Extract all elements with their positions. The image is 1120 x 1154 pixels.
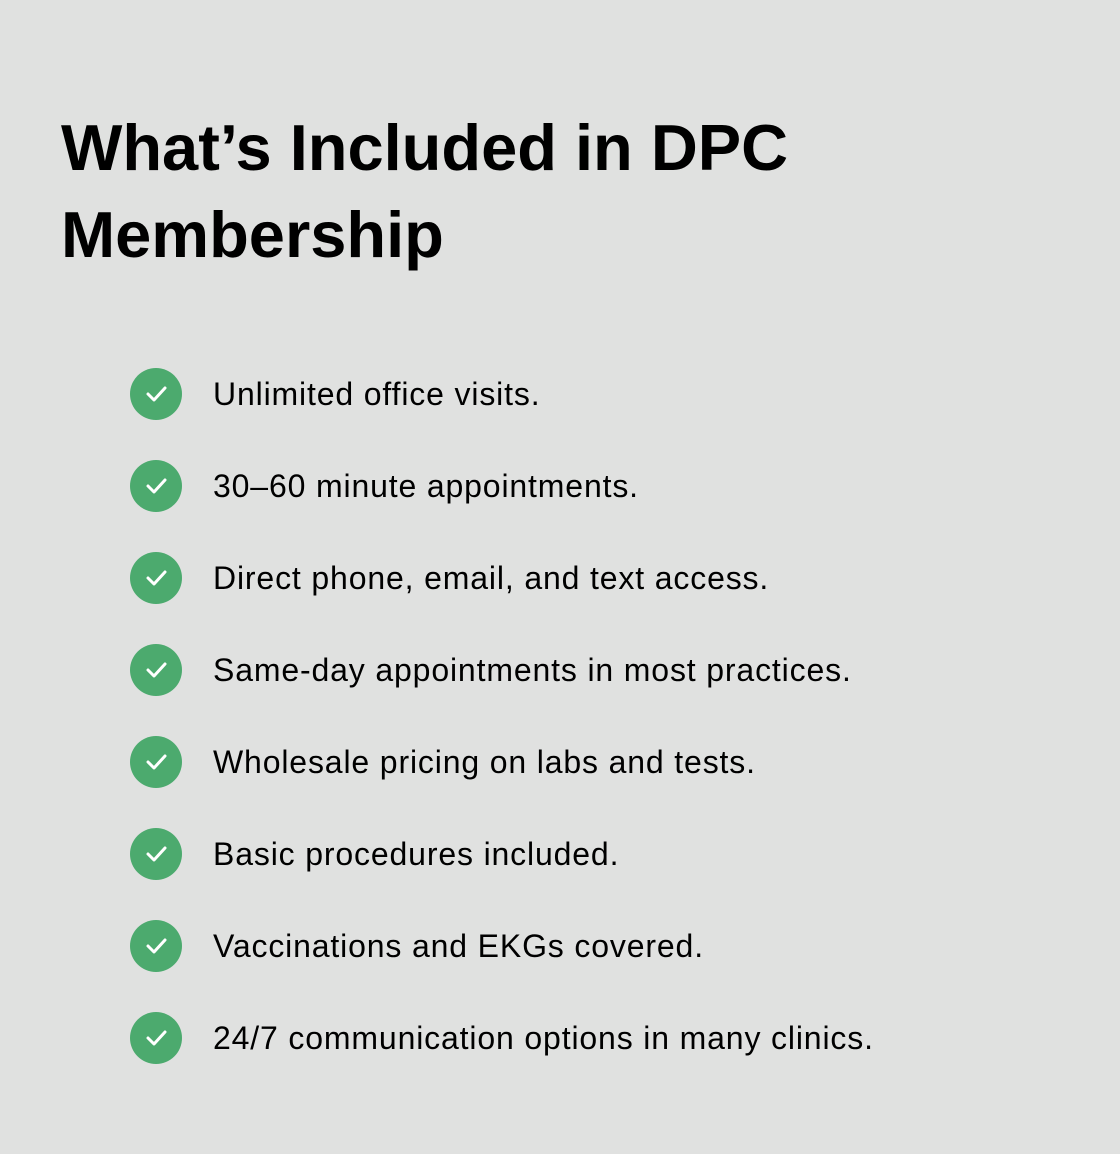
title: Membership: [61, 198, 444, 271]
icon: check: [130, 736, 182, 788]
icon: check: [130, 368, 182, 420]
icon: check: [130, 920, 182, 972]
list item 1: [130, 368, 540, 420]
list item 2: [130, 460, 639, 512]
icon: check: [130, 552, 182, 604]
text: Vaccinations and EKGs covered.: [213, 928, 704, 964]
list item 7: [130, 920, 704, 972]
text: Basic procedures included.: [213, 836, 619, 872]
icon: check: [130, 644, 182, 696]
text: Unlimited office visits.: [213, 376, 540, 412]
text: 30–60 minute appointments.: [213, 468, 639, 504]
text: 24/7 communication options in many clinics.: [213, 1020, 874, 1056]
icon: check: [130, 828, 182, 880]
title: What’s Included in DPC: [61, 111, 788, 184]
text: Wholesale pricing on labs and tests.: [213, 744, 756, 780]
list item 3: [130, 552, 769, 604]
icon: check: [130, 460, 182, 512]
list item 5: [130, 736, 756, 788]
list item 8: [130, 1012, 874, 1064]
title: [61, 111, 788, 271]
list item 4: [130, 644, 852, 696]
text: Direct phone, email, and text access.: [213, 560, 769, 596]
text: Same-day appointments in most practices.: [213, 652, 852, 688]
icon: check: [130, 1012, 182, 1064]
list item 6: [130, 828, 619, 880]
